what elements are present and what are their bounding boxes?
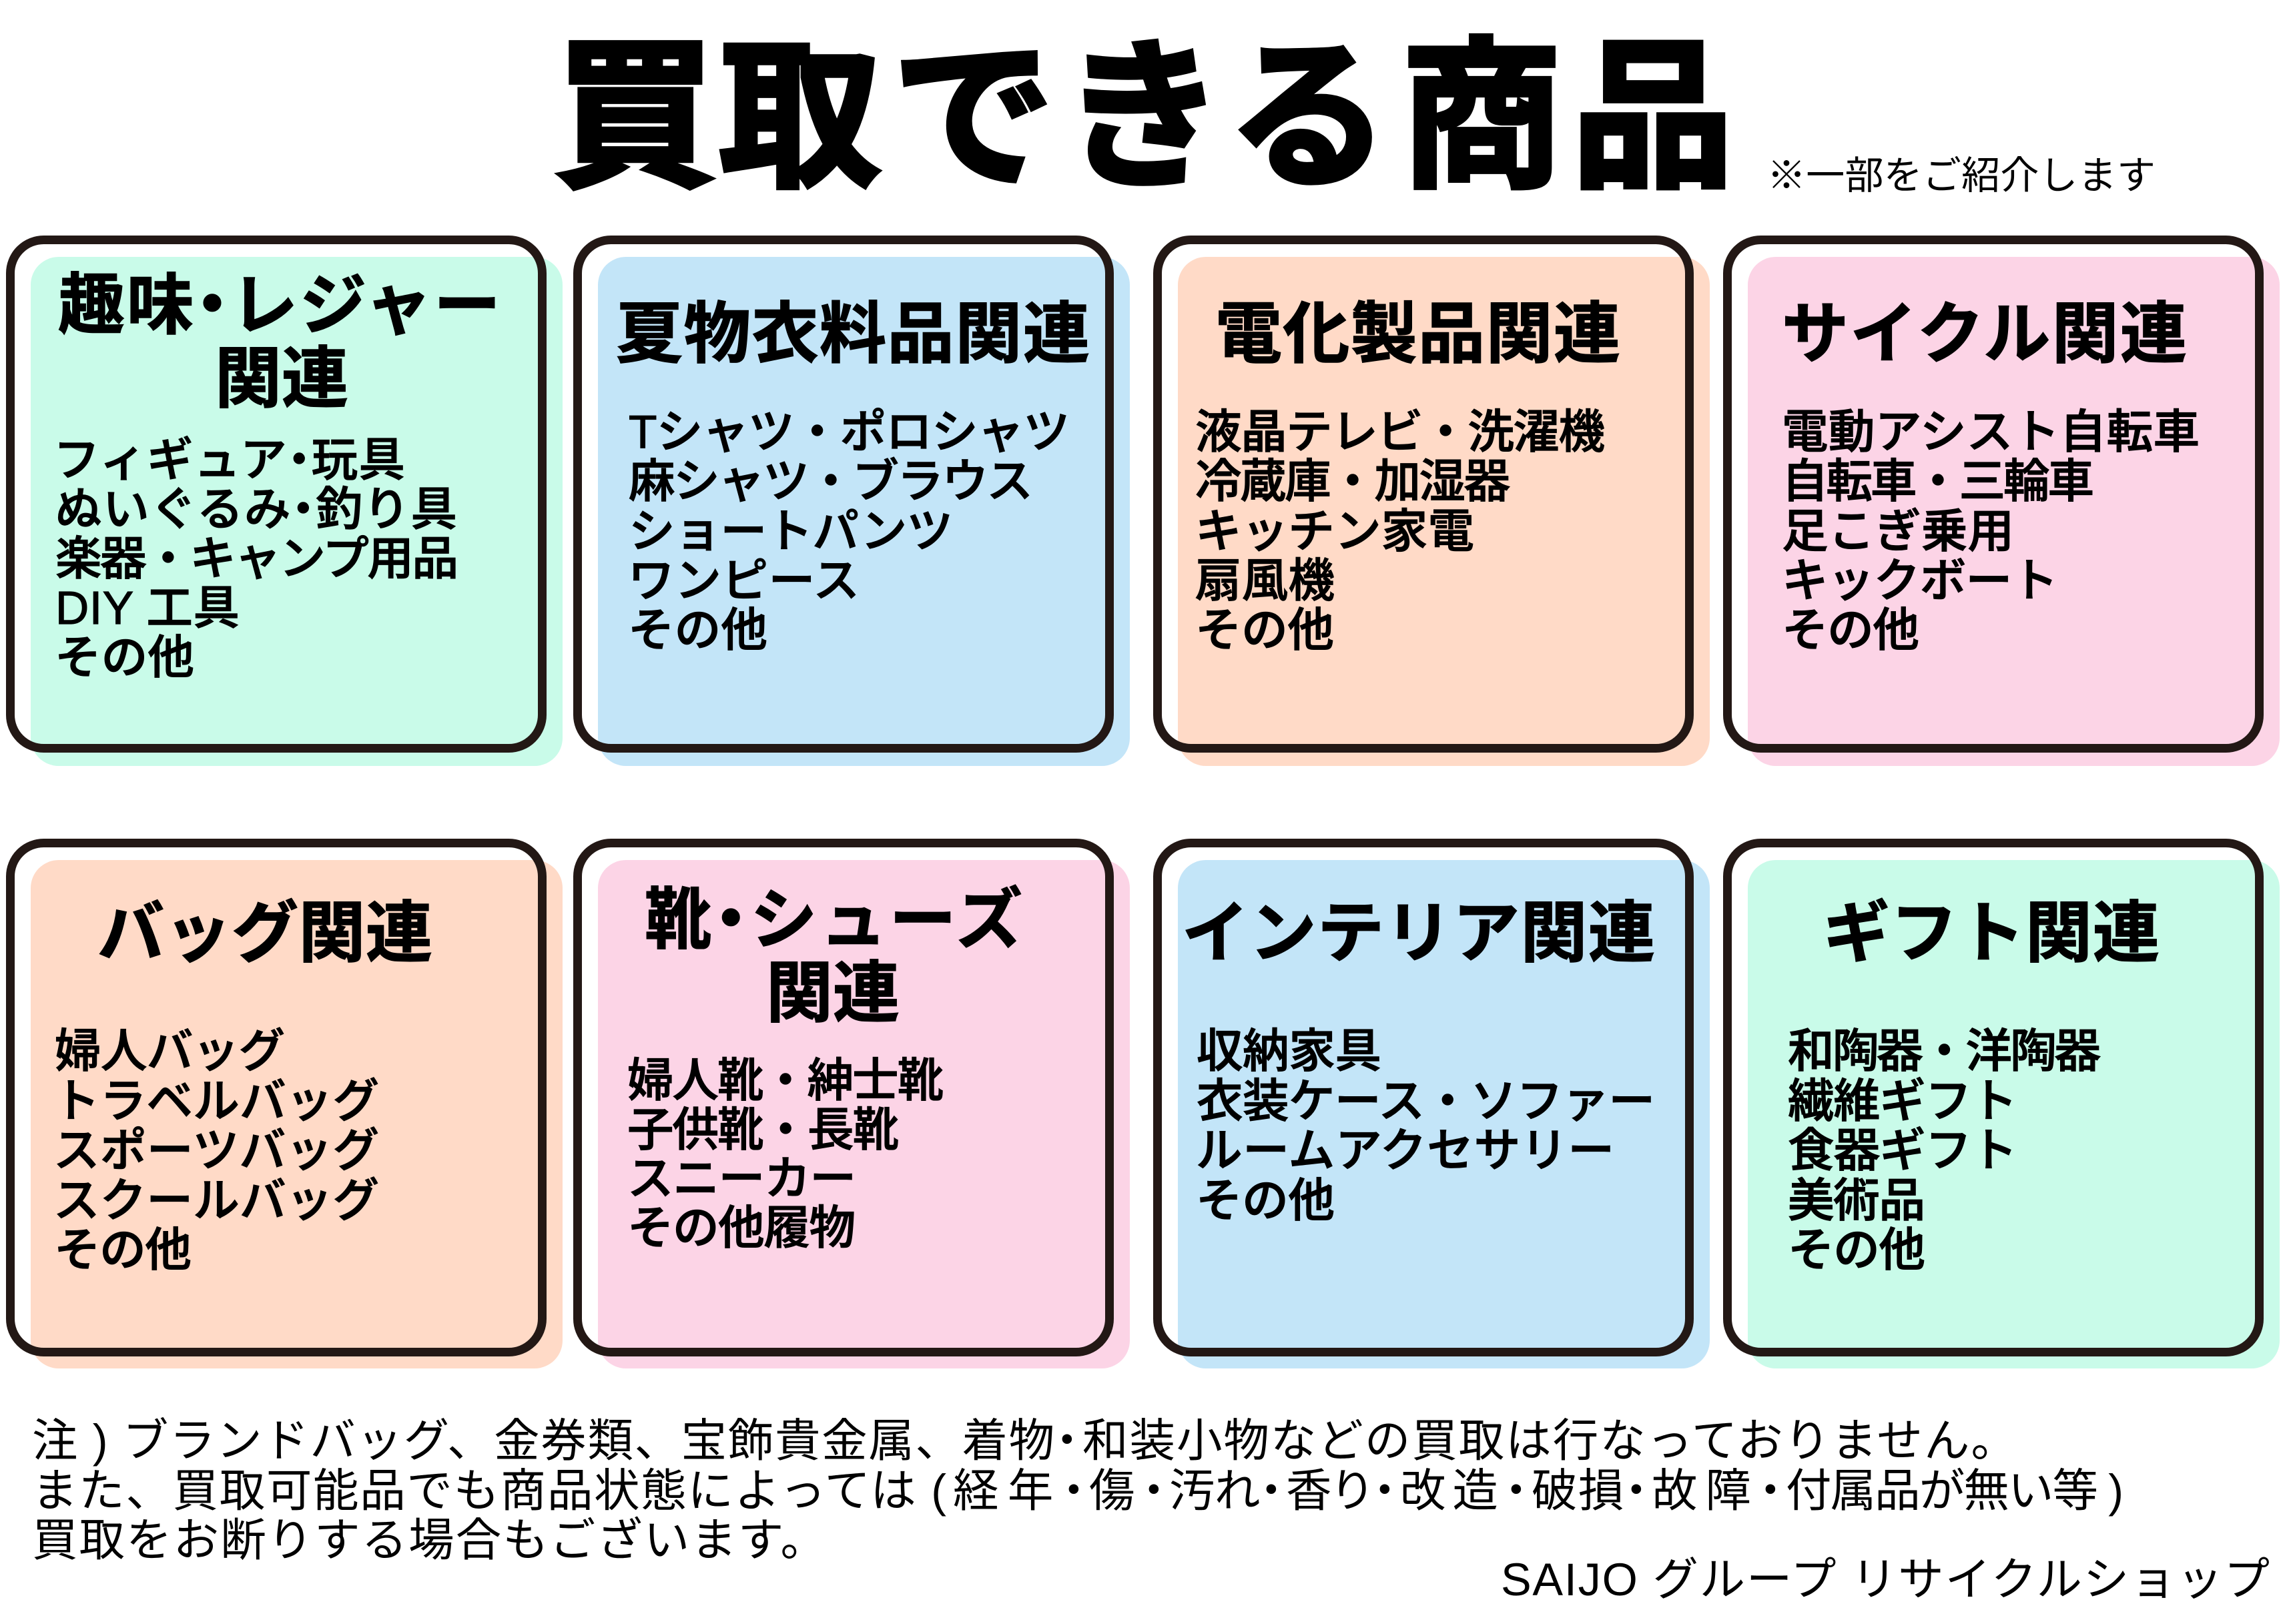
panel: bags [11,843,563,1368]
footnote text: 破損・ [1532,1465,1648,1517]
heading: shoes: 靴・シューズ [645,883,1022,957]
list: gift items: 美術品 [1788,1174,1925,1226]
list: electronics items: 扇風機 [1195,554,1335,606]
list: summer clothing items: ワンピース [628,554,860,606]
list: hobby and leisure items: その他 [55,631,194,683]
list: bag items: トラベルバッグ [53,1075,379,1127]
list: summer clothing items: ショートパンツ [629,505,953,557]
heading: cycling: サイクル関連 [1782,297,2187,372]
list: shoe items: スニーカー [627,1152,856,1204]
list: bag items: その他 [54,1224,192,1276]
list: cycling items: その他 [1782,604,1919,656]
list: interior items: ルームアクセサリー [1196,1124,1614,1176]
list: electronics items: 冷蔵庫・加湿器 [1195,455,1510,507]
heading: shoes: 関連 [766,956,900,1031]
list: gift items: 繊維ギフト [1788,1075,2017,1127]
footnote text: 付属品が無い等 ) [1786,1465,2123,1517]
heading: summer clothing: 夏物衣料品関連 [616,297,1090,372]
list: shoe items [627,1054,944,1254]
list: summer clothing items: 麻シャツ・ブラウス [629,455,1033,507]
list: shoe items: 子供靴・長靴 [627,1104,899,1156]
footnote text [32,1415,2123,1566]
list: interior items [1196,1025,1655,1226]
footnote text: 買取をお断りする場合もございます。 [32,1515,826,1566]
footnote text: 故障・ [1652,1465,1782,1517]
footnote text: 傷・ [1089,1465,1165,1517]
heading: electronics: 電化製品関連 [1215,297,1620,372]
heading: shoes [645,883,1022,1031]
heading: hobby and leisure: 関連 [215,342,348,416]
company credit: SAIJO グループ リサイクルショップ [1501,1554,2270,1605]
list: electronics items: 液晶テレビ・洗濯機 [1195,406,1605,458]
list: cycling items: 電動アシスト自転車 [1782,406,2200,458]
panel: gifts [1727,843,2280,1368]
list: cycling items: キックボート [1782,554,2058,606]
list: interior items: その他 [1196,1174,1335,1226]
list: hobby and leisure items: フィギュア・玩具 [53,434,405,486]
panel: interior [1157,843,1710,1368]
heading: bags: バッグ関連 [97,896,432,971]
list: gift items: 和陶器・洋陶器 [1788,1025,2101,1077]
subtitle note: ※一部をご紹介します [1767,154,2156,197]
list: summer clothing items: Tシャツ・ポロシャツ [629,406,1070,458]
panel: summer clothing [578,240,1130,766]
title: 買取できる商品 [554,27,1734,208]
footnote text: また、買取可能品でも商品状態によっては ( [32,1465,946,1517]
list: interior items: 収納家具 [1197,1025,1381,1077]
list: summer clothing items: その他 [628,604,767,656]
panel: shoes [578,843,1130,1368]
list: shoe items: 婦人靴・紳士靴 [627,1054,944,1106]
list: bag items: スクールバッグ [53,1174,379,1226]
list: shoe items: その他履物 [627,1202,856,1254]
list: hobby and leisure items: DIY 工具 [55,582,240,634]
list: hobby and leisure items: ぬいぐるみ・釣り具 [55,483,457,535]
list: gift items: 食器ギフト [1788,1124,2017,1176]
panel: electronics [1157,240,1710,766]
list: bag items: 婦人バッグ [55,1025,285,1077]
footnote text: 香り・ [1286,1465,1396,1517]
list: electronics items [1195,406,1605,656]
footnote text: 経年・ [953,1465,1085,1517]
heading: interior: インテリア関連 [1182,896,1655,971]
heading: hobby and leisure: 趣味・レジャー [58,268,501,343]
list: bag items: スポーツバッグ [53,1124,379,1176]
footnote text: 改造・ [1400,1465,1528,1517]
list: summer clothing items [628,406,1070,656]
list: cycling items [1782,406,2200,656]
list: hobby and leisure items [53,434,458,683]
footnote text: 汚れ・ [1169,1465,1283,1517]
list: gift items: その他 [1788,1224,1925,1276]
list: cycling items: 自転車・三輪車 [1782,455,2094,507]
footnote text: 和装小物などの買取は行なっておりません。 [1082,1415,2017,1467]
list: bag items [53,1025,379,1276]
list: electronics items: キッチン家電 [1195,505,1474,557]
heading: hobby and leisure [58,268,501,416]
panel: hobby and leisure [11,240,563,766]
list: electronics items: その他 [1195,604,1334,656]
list: cycling items: 足こぎ乗用 [1782,505,2014,557]
footnote text: 注 ) ブランドバッグ、金券類、宝飾貴金属、着物・ [32,1415,1078,1467]
panel: cycling [1727,240,2280,766]
list: hobby and leisure items: 楽器・キャンプ用品 [55,532,458,584]
list: interior items: 衣装ケース・ソファー [1197,1075,1655,1127]
list: gift items [1788,1025,2101,1276]
heading: gifts: ギフト関連 [1823,896,2160,971]
